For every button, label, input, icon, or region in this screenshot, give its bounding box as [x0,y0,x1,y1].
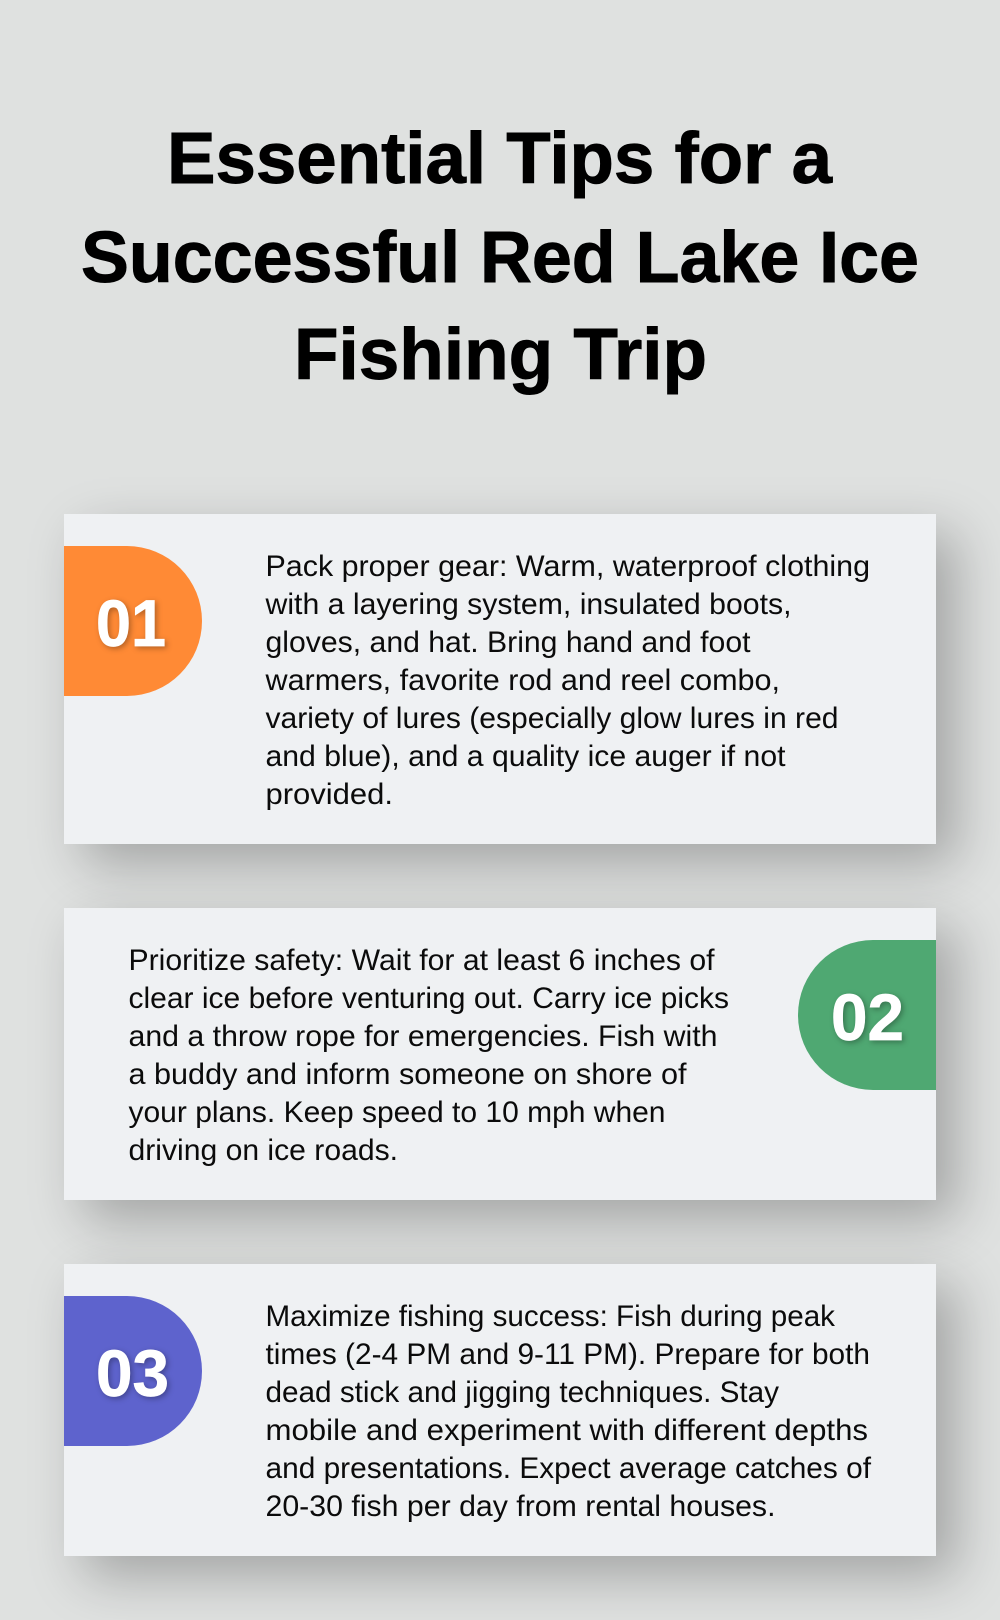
text: tip 02: clear ice before venturing out. Carry ice picks [128,982,729,1015]
text: tip 02: driving on ice roads. [128,1134,398,1167]
number: 03: 03 [96,1336,169,1410]
text: tip 03: dead stick and jigging techniques. Stay [266,1376,779,1409]
panel: tip 02 card [64,908,936,1200]
title: Successful Red Lake Ice [81,218,919,298]
text: tip 01: and blue), and a quality ice auger if not [266,740,786,773]
text: tip 03: mobile and experiment with different depths [266,1414,868,1447]
panel: tip 03 card [64,1264,936,1556]
title [81,119,919,395]
text: tip 02 [128,944,729,1167]
text: tip 02: your plans. Keep speed to 10 mph when [128,1096,666,1129]
text: tip 01: with a layering system, insulated boots, [264,588,792,621]
text: tip 03: 20-30 fish per day from rental houses. [266,1490,776,1523]
text: tip 03: times (2-4 PM and 9-11 PM). Prepare for both [266,1338,870,1371]
title: Essential Tips for a [167,119,833,199]
text: tip 02: Prioritize safety: Wait for at least 6 inches of [128,944,715,977]
number: 02: 02 [831,980,904,1054]
panel: tip 01 card [64,514,936,844]
text: tip 03: Maximize fishing success: Fish during peak [266,1300,836,1333]
text: tip 03 [266,1300,872,1523]
badge: 03 [64,1296,202,1446]
text: tip 02: a buddy and inform someone on shore of [128,1058,687,1091]
number: 01: 01 [96,586,166,660]
title: Fishing Trip [294,315,707,395]
text: tip 01 [264,550,870,811]
text: tip 01: warmers, favorite rod and reel combo, [264,664,780,697]
text: tip 01: variety of lures (especially glow lures in red [266,702,838,735]
badge: 02 [798,940,936,1090]
text: tip 03: and presentations. Expect average catches of [266,1452,872,1485]
badge: 01 [64,546,202,696]
text: tip 01: provided. [266,778,393,811]
text: tip 01: gloves, and hat. Bring hand and foot [266,626,751,659]
text: tip 02: and a throw rope for emergencies. Fish with [128,1020,718,1053]
text: tip 01: Pack proper gear: Warm, waterproof clothing [266,550,870,583]
